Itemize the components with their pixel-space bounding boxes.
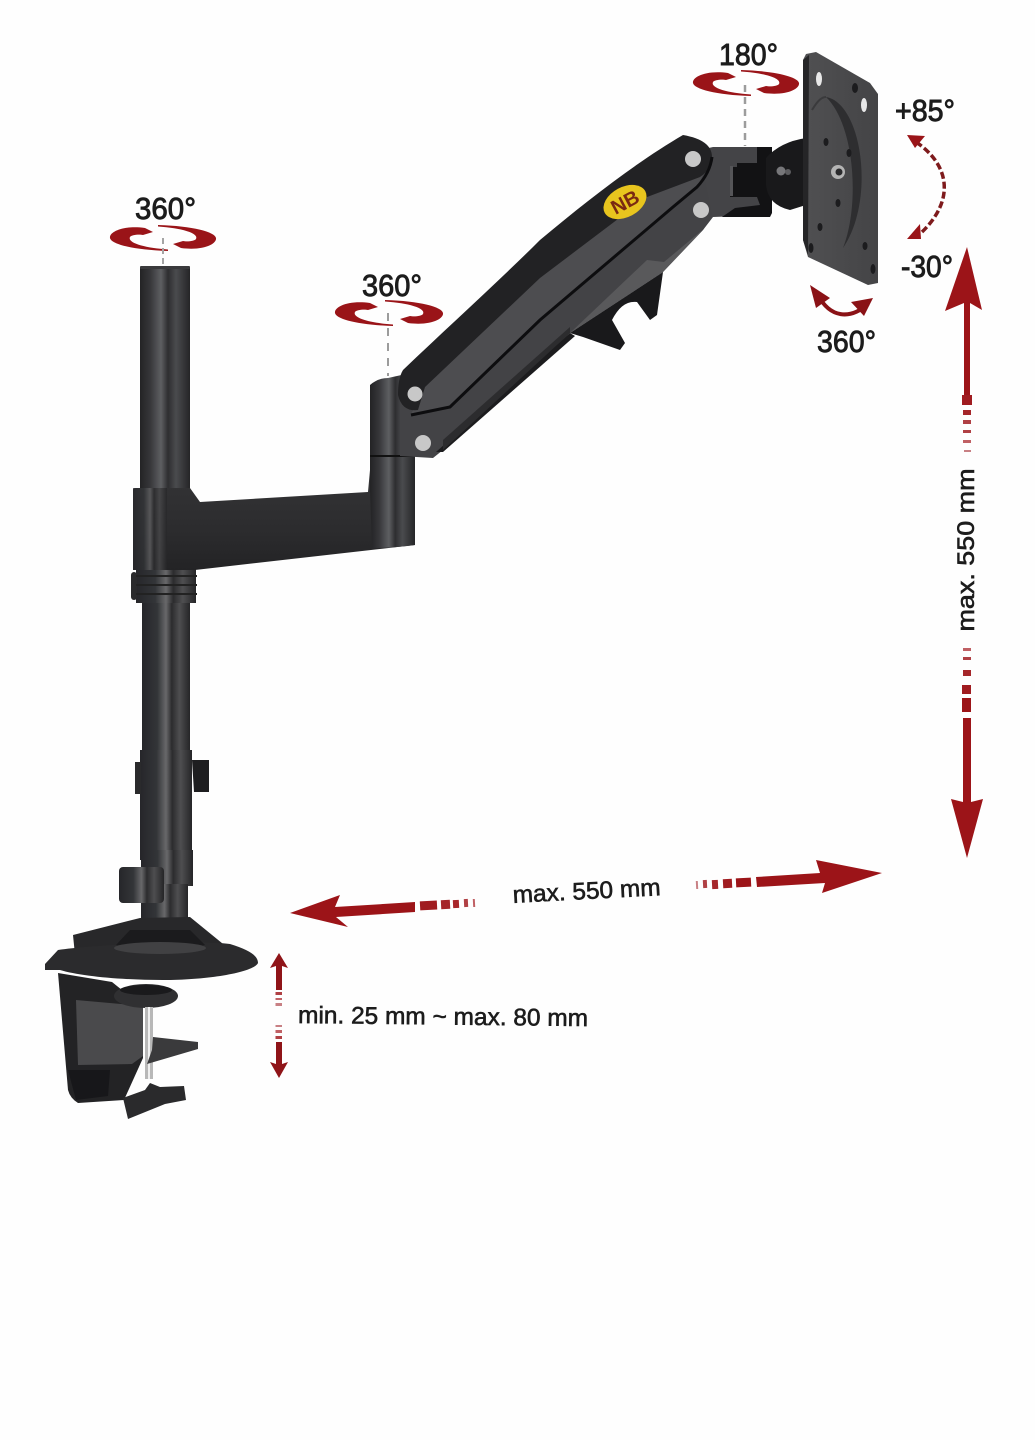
tilt label: up: +85°	[895, 93, 955, 128]
rotation arrow: elbow	[335, 300, 443, 376]
swivel label: 360°	[817, 324, 876, 359]
desk thickness arrow	[270, 953, 288, 1078]
clamp screw knob	[114, 984, 178, 1008]
desk thickness label: min. 25 mm ~ max. 80 mm	[298, 1002, 588, 1032]
vertical dimension label: max. 550 mm	[953, 468, 980, 632]
horizontal dimension label: max. 550 mm	[512, 874, 661, 909]
cable clip	[570, 272, 663, 350]
rotation arrow: head	[693, 70, 799, 146]
arm medium band	[411, 157, 712, 414]
clamp body	[58, 973, 143, 1103]
clamp top plate	[73, 917, 228, 955]
horizontal arm and collar	[133, 470, 415, 570]
slit line	[411, 157, 712, 415]
rotation label: elbow: 360°	[362, 268, 422, 303]
VESA mounting plate	[803, 52, 878, 285]
rotation label: pole: 360°	[135, 191, 196, 226]
desk clamp base	[45, 850, 258, 1119]
vertical dimension arrow	[945, 247, 983, 858]
arm lower edge strip	[436, 333, 575, 452]
gas spring arm	[398, 135, 712, 458]
plate holes	[808, 72, 876, 274]
elbow column	[370, 372, 415, 548]
arm bolts	[408, 151, 709, 451]
tilt label: down: -30°	[901, 249, 953, 284]
upper pole	[140, 266, 190, 492]
swivel arrow under plate	[810, 285, 873, 316]
rotation label: head: 180°	[719, 37, 778, 72]
lower pole with height ridges	[131, 567, 209, 860]
clamp screw	[145, 1007, 153, 1079]
wing nut	[123, 1083, 186, 1119]
NB logo badge: NB	[608, 186, 643, 219]
horizontal dimension arrow	[290, 860, 882, 927]
NB logo badge	[598, 178, 652, 226]
clamp neck	[119, 850, 193, 928]
rotation arrow: pole top	[110, 225, 216, 266]
clamp pad	[147, 1037, 198, 1064]
tilt arrow	[907, 135, 944, 239]
clamp disc	[45, 942, 258, 980]
arm lighter plane	[570, 230, 703, 333]
arm top cover dark band	[398, 135, 712, 410]
arm lower section	[400, 170, 712, 458]
monitor arm product	[45, 52, 878, 1119]
tilt head joint	[690, 138, 806, 230]
